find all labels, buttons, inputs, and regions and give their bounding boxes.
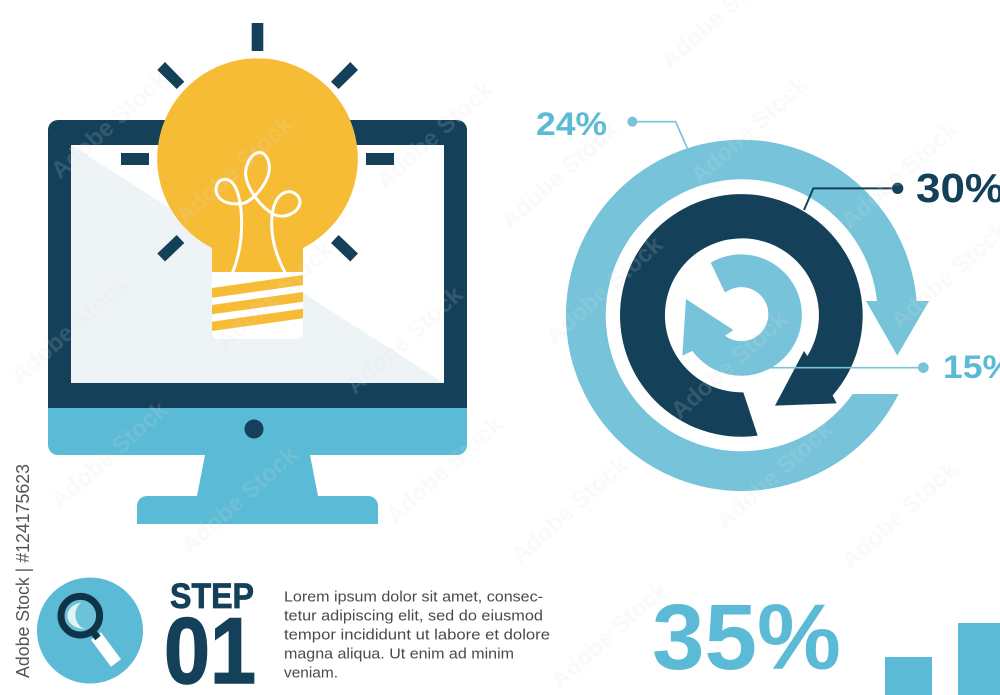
bar chart (885, 623, 1000, 695)
text block: description: magna aliqua. Ut enim ad minim (284, 645, 514, 662)
lens glint (68, 603, 85, 629)
watermark: Adobe Stock (176, 441, 304, 559)
magnifier handle (96, 636, 116, 663)
outer arrow ring (566, 140, 929, 491)
panel: monitor (48, 120, 467, 524)
power button (244, 420, 264, 438)
text block: description (284, 589, 550, 681)
watermark: Adobe Stock (711, 416, 839, 534)
leader: 30% (804, 183, 903, 210)
watermark: Adobe Stock (381, 411, 509, 529)
inner arrow ring (682, 254, 802, 376)
text block: description: tempor incididunt ut labore et dolore (284, 626, 550, 644)
magnifier badge (37, 578, 143, 684)
monitor screen (71, 145, 444, 383)
watermark: Adobe Stock (836, 456, 964, 574)
bulb screw base (212, 272, 303, 339)
monitor base (137, 496, 378, 524)
watermark: Adobe Stock (341, 281, 469, 399)
icon: magnifier (37, 578, 143, 684)
base stripes (212, 275, 303, 331)
watermark: Adobe Stock (496, 116, 624, 234)
leader: 15% (770, 362, 929, 373)
monitor chin (48, 408, 467, 455)
stock credit: Adobe Stock | #124175623 (13, 464, 33, 678)
bulb glass (157, 58, 358, 273)
big stat: 35%: 35% (652, 585, 841, 689)
monitor stand (197, 455, 318, 496)
leader: 24% (627, 117, 687, 148)
watermark: Adobe Stock (211, 236, 339, 354)
chart: circular arrows (566, 117, 929, 491)
watermark: Adobe Stock (836, 116, 964, 234)
bulb filament (216, 153, 300, 272)
bulb rays (121, 23, 394, 262)
watermark: Adobe Stock (46, 396, 174, 514)
watermark: Adobe Stock (6, 271, 134, 389)
text block: description: Lorem ipsum dolor sit amet, consec- (284, 589, 543, 606)
watermark: Adobe Stock (541, 231, 669, 349)
magnifier lens (61, 596, 100, 635)
watermark: Adobe Stock (171, 111, 299, 229)
watermark: Adobe Stock (371, 76, 499, 194)
monitor frame (48, 120, 467, 408)
watermark: Adobe Stock (686, 71, 814, 189)
watermark: Adobe Stock (46, 66, 174, 184)
magnifier connector (92, 631, 98, 638)
text block: description: veniam. (284, 664, 338, 681)
text block: description: tetur adipiscing elit, sed do eiusmod (284, 608, 543, 625)
heading: step: STEP (170, 577, 254, 616)
label: 30%: 30% (916, 165, 1000, 211)
icon: light bulb (121, 23, 394, 339)
screen shade (71, 145, 444, 383)
watermark: Adobe Stock (546, 576, 674, 694)
watermark: Adobe Stock (666, 306, 794, 424)
middle arrow ring (620, 194, 863, 437)
watermark: Adobe Stock (506, 451, 634, 569)
label: 24%: 24% (536, 106, 607, 142)
